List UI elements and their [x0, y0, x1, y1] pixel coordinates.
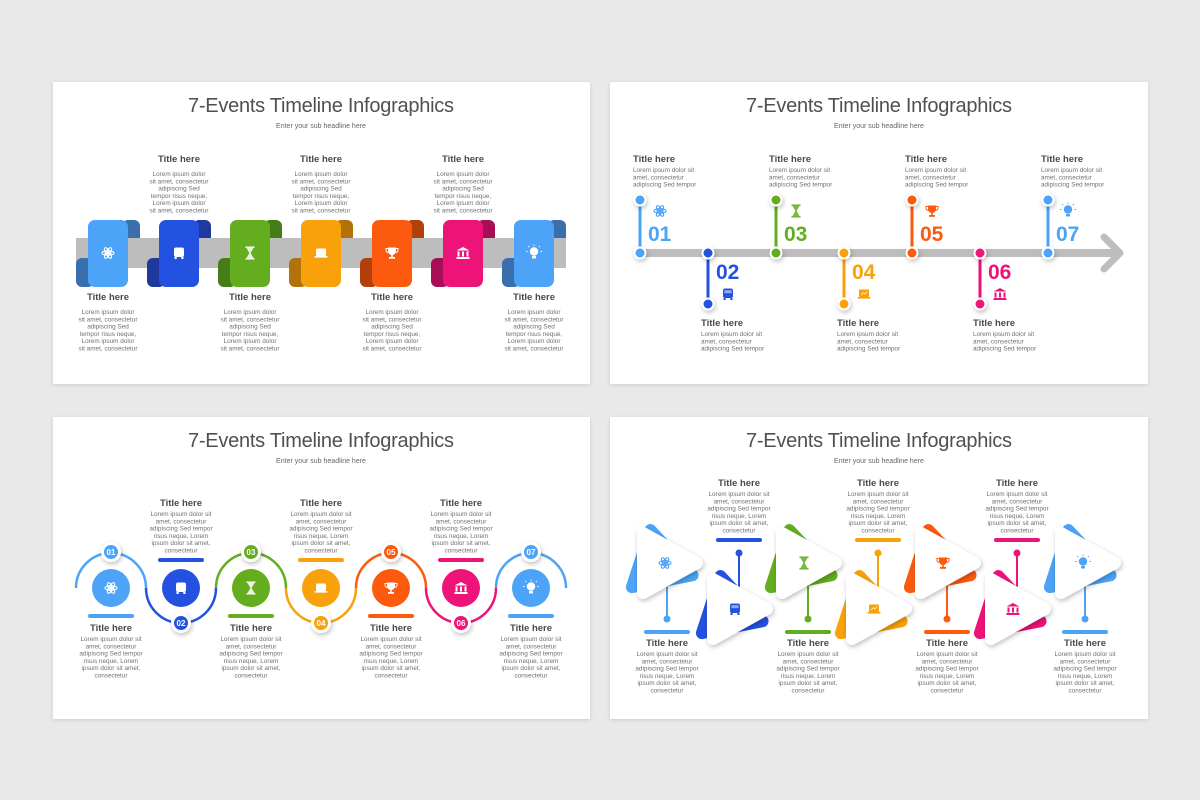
text blocks: adipiscing Sed — [513, 324, 555, 331]
number badges: 01 — [107, 548, 116, 557]
subtitle: Enter your sub headline here — [276, 123, 366, 130]
text blocks: Title here — [300, 498, 342, 509]
text blocks: Lorem ipsum dolor sit — [80, 636, 142, 643]
text blocks: Lorem ipsum dolor — [295, 171, 348, 178]
text blocks: adipiscing Sed — [229, 324, 271, 331]
stems and nodes — [634, 194, 1054, 310]
numbers and icons: 04 — [852, 261, 876, 284]
text blocks — [635, 478, 1117, 694]
text blocks: adipiscing Sed tempor — [499, 651, 563, 658]
text blocks: risus neque, Lorem — [364, 658, 418, 665]
text blocks: amet, consectetur — [633, 174, 685, 181]
text blocks: adipiscing Sed — [158, 186, 200, 193]
text blocks: risus neque, Lorem — [224, 658, 278, 665]
text blocks: Title here — [701, 318, 743, 329]
text blocks: sit amet, consectetur — [150, 178, 209, 185]
text blocks: Title here — [370, 623, 412, 634]
arrow — [640, 237, 1120, 269]
text blocks: consectetur — [650, 688, 684, 694]
text blocks: amet, consectetur — [922, 658, 973, 665]
text blocks: Title here — [633, 154, 675, 165]
subtitle: Enter your sub headline here — [834, 123, 924, 130]
stems, dots and bars — [644, 538, 1108, 634]
text blocks: adipiscing Sed tempor — [769, 182, 833, 189]
text blocks: ipsum dolor sit amet, — [362, 665, 421, 672]
text blocks: sit amet, consectetur — [434, 208, 493, 214]
text blocks: sit amet, consectetur — [79, 316, 138, 323]
text blocks: tempor risus neque, — [151, 193, 207, 200]
number badges: 04 — [317, 619, 326, 628]
text blocks: Lorem ipsum dolor — [153, 171, 206, 178]
text blocks: Title here — [87, 292, 129, 303]
text blocks: Lorem ipsum dolor sit — [708, 491, 770, 498]
text blocks: risus neque, Lorem — [504, 658, 558, 665]
text blocks: Lorem ipsum dolor sit — [701, 331, 762, 338]
text blocks: ipsum dolor sit amet, — [292, 540, 351, 547]
text blocks: ipsum dolor sit amet, — [82, 665, 141, 672]
text blocks: ipsum dolor sit amet, — [710, 520, 769, 527]
text blocks: risus neque, Lorem — [84, 658, 138, 665]
text blocks: Lorem ipsum dolor — [224, 309, 277, 316]
text blocks: risus neque, Lorem — [294, 533, 348, 540]
text blocks: tempor risus neque, — [364, 331, 420, 338]
text blocks: Title here — [837, 318, 879, 329]
text blocks: tempor risus neque, — [80, 331, 136, 338]
text blocks: Title here — [371, 292, 413, 303]
cards — [88, 220, 554, 287]
text blocks: sit amet, consectetur — [292, 208, 351, 214]
text blocks: adipiscing Sed tempor — [79, 651, 143, 658]
text blocks: adipiscing Sed tempor — [985, 506, 1049, 513]
text blocks: amet, consectetur — [1041, 174, 1093, 181]
text blocks: Lorem ipsum dolor sit — [973, 331, 1034, 338]
text blocks: adipiscing Sed tempor — [915, 666, 979, 673]
text blocks: adipiscing Sed tempor — [776, 666, 840, 673]
text blocks: adipiscing Sed tempor — [149, 526, 213, 533]
text blocks: sit amet, consectetur — [363, 346, 422, 352]
text blocks: Lorem ipsum dolor — [153, 200, 206, 207]
text blocks: ipsum dolor sit amet, — [918, 680, 977, 687]
text blocks: adipiscing Sed tempor — [1053, 666, 1117, 673]
number badges: 02 — [177, 619, 186, 628]
numbers and icons: 01 — [648, 223, 672, 246]
text blocks: amet, consectetur — [853, 498, 904, 505]
panel: triangle timeline — [610, 417, 1148, 719]
number badges: 06 — [457, 619, 466, 628]
text blocks: amet, consectetur — [769, 174, 821, 181]
text blocks: consectetur — [164, 548, 198, 554]
numbers and icons: 06 — [988, 261, 1011, 284]
text blocks: amet, consectetur — [436, 518, 487, 525]
text blocks: consectetur — [94, 672, 128, 680]
text blocks — [79, 498, 563, 680]
text blocks: risus neque, Lorem — [712, 513, 766, 520]
text blocks: Lorem ipsum dolor — [437, 171, 490, 178]
text blocks: sit amet, consectetur — [221, 316, 280, 323]
text blocks: Title here — [440, 498, 482, 509]
text blocks: Title here — [513, 292, 555, 303]
title: 7-Events Timeline Infographics — [746, 95, 1012, 117]
text blocks: amet, consectetur — [296, 518, 347, 525]
text blocks: tempor risus neque, — [435, 193, 491, 200]
text blocks: risus neque, Lorem — [640, 673, 694, 680]
text blocks: adipiscing Sed — [371, 324, 413, 331]
numbers and icons — [648, 202, 1079, 300]
text blocks: Title here — [857, 478, 899, 489]
text blocks: adipiscing Sed tempor — [1041, 182, 1105, 189]
text blocks: adipiscing Sed — [300, 186, 342, 193]
text blocks: ipsum dolor sit amet, — [502, 665, 561, 672]
text blocks: sit amet, consectetur — [292, 178, 351, 185]
text blocks: ipsum dolor sit amet, — [988, 520, 1047, 527]
text blocks: Lorem ipsum dolor sit — [1041, 167, 1102, 174]
text blocks: Lorem ipsum dolor — [508, 309, 561, 316]
number badges: 03 — [247, 548, 256, 557]
text blocks: Lorem ipsum dolor — [82, 338, 135, 345]
text blocks: amet, consectetur — [366, 643, 417, 650]
number badges: 05 — [387, 548, 396, 557]
text blocks: amet, consectetur — [973, 338, 1025, 345]
text blocks: Title here — [1064, 638, 1106, 649]
text blocks: Title here — [442, 154, 484, 165]
text blocks: Lorem ipsum dolor sit — [500, 636, 562, 643]
text blocks: amet, consectetur — [156, 518, 207, 525]
text blocks: Lorem ipsum dolor — [224, 338, 277, 345]
text blocks: adipiscing Sed tempor — [219, 651, 283, 658]
text blocks: consectetur — [722, 528, 756, 534]
text blocks: tempor risus neque, — [506, 331, 562, 338]
text blocks: risus neque, Lorem — [851, 513, 905, 520]
text blocks: Title here — [973, 318, 1015, 329]
text blocks — [633, 154, 1105, 353]
text blocks: sit amet, consectetur — [505, 316, 564, 323]
text blocks: adipiscing Sed tempor — [429, 526, 493, 533]
text blocks: adipiscing Sed — [87, 324, 129, 331]
text blocks: Lorem ipsum dolor sit — [290, 511, 352, 518]
text blocks: Title here — [646, 638, 688, 649]
text blocks: consectetur — [1000, 528, 1034, 534]
text blocks: sit amet, consectetur — [505, 346, 564, 352]
text blocks: ipsum dolor sit amet, — [152, 540, 211, 547]
text blocks: consectetur — [861, 528, 895, 534]
text blocks: adipiscing Sed tempor — [635, 666, 699, 673]
text blocks: risus neque, Lorem — [434, 533, 488, 540]
text blocks: adipiscing Sed tempor — [359, 651, 423, 658]
title: 7-Events Timeline Infographics — [188, 95, 454, 117]
title: 7-Events Timeline Infographics — [746, 430, 1012, 452]
text blocks: adipiscing Sed — [442, 186, 484, 193]
text blocks: risus neque, Lorem — [920, 673, 974, 680]
panel: ribbon timeline — [53, 82, 590, 384]
text blocks: Lorem ipsum dolor sit — [1054, 651, 1116, 658]
text blocks: adipiscing Sed tempor — [846, 506, 910, 513]
text blocks: Lorem ipsum dolor — [366, 338, 419, 345]
text blocks: Title here — [300, 154, 342, 165]
text blocks: adipiscing Sed tempor — [837, 346, 901, 353]
panel: wave timeline — [53, 417, 590, 719]
text blocks: consectetur — [930, 688, 964, 694]
text blocks: Title here — [926, 638, 968, 649]
text blocks: Lorem ipsum dolor sit — [986, 491, 1048, 498]
text blocks: Lorem ipsum dolor sit — [837, 331, 898, 338]
text blocks: consectetur — [234, 672, 268, 680]
text blocks: ipsum dolor sit amet, — [638, 680, 697, 687]
text blocks — [79, 154, 564, 352]
text blocks: ipsum dolor sit amet, — [849, 520, 908, 527]
text blocks: Lorem ipsum dolor sit — [905, 167, 966, 174]
text blocks: amet, consectetur — [86, 643, 137, 650]
text blocks: consectetur — [791, 688, 825, 694]
text blocks: Title here — [718, 478, 760, 489]
text blocks: amet, consectetur — [992, 498, 1043, 505]
text blocks: amet, consectetur — [783, 658, 834, 665]
text blocks: sit amet, consectetur — [150, 208, 209, 214]
text blocks: ipsum dolor sit amet, — [1056, 680, 1115, 687]
text blocks: Lorem ipsum dolor sit — [150, 511, 212, 518]
text blocks: Title here — [787, 638, 829, 649]
text blocks: risus neque, Lorem — [154, 533, 208, 540]
numbers and icons: 03 — [784, 223, 807, 246]
text blocks: consectetur — [374, 672, 408, 680]
text blocks: tempor risus neque, — [293, 193, 349, 200]
text blocks: Lorem ipsum dolor — [437, 200, 490, 207]
numbers and icons: 05 — [920, 223, 944, 246]
text blocks: consectetur — [1068, 688, 1102, 694]
text blocks: Lorem ipsum dolor sit — [777, 651, 839, 658]
text blocks: Lorem ipsum dolor sit — [847, 491, 909, 498]
text blocks: Lorem ipsum dolor sit — [430, 511, 492, 518]
text blocks: risus neque, Lorem — [1058, 673, 1112, 680]
panel: arrow timeline — [610, 82, 1148, 384]
text blocks: Lorem ipsum dolor sit — [916, 651, 978, 658]
text blocks: Lorem ipsum dolor sit — [220, 636, 282, 643]
text blocks: ipsum dolor sit amet, — [432, 540, 491, 547]
number badges: 07 — [527, 548, 536, 557]
text blocks: sit amet, consectetur — [221, 346, 280, 352]
text blocks: adipiscing Sed tempor — [633, 182, 697, 189]
text blocks: Lorem ipsum dolor — [82, 309, 135, 316]
text blocks: Title here — [158, 154, 200, 165]
text blocks: Title here — [996, 478, 1038, 489]
text blocks: amet, consectetur — [226, 643, 277, 650]
text blocks: adipiscing Sed tempor — [289, 526, 353, 533]
text blocks: amet, consectetur — [701, 338, 753, 345]
text blocks: Lorem ipsum dolor — [366, 309, 419, 316]
text blocks: Lorem ipsum dolor — [295, 200, 348, 207]
ribbon band — [76, 220, 566, 287]
text blocks: sit amet, consectetur — [434, 178, 493, 185]
text blocks: sit amet, consectetur — [363, 316, 422, 323]
text blocks: Title here — [160, 498, 202, 509]
numbers and icons: 02 — [716, 261, 739, 284]
text blocks: Lorem ipsum dolor sit — [360, 636, 422, 643]
text blocks: Title here — [229, 292, 271, 303]
text blocks: sit amet, consectetur — [79, 346, 138, 352]
text blocks: adipiscing Sed tempor — [973, 346, 1037, 353]
text blocks: adipiscing Sed tempor — [707, 506, 771, 513]
text blocks: Title here — [510, 623, 552, 634]
text blocks: Title here — [905, 154, 947, 165]
text blocks: tempor risus neque, — [222, 331, 278, 338]
text blocks: Lorem ipsum dolor sit — [633, 167, 694, 174]
text blocks: risus neque, Lorem — [781, 673, 835, 680]
text blocks: consectetur — [444, 548, 478, 554]
triangles — [632, 530, 1120, 650]
subtitle: Enter your sub headline here — [276, 458, 366, 465]
text blocks: Lorem ipsum dolor — [508, 338, 561, 345]
text blocks: amet, consectetur — [506, 643, 557, 650]
text blocks: Lorem ipsum dolor sit — [636, 651, 698, 658]
text blocks: ipsum dolor sit amet, — [222, 665, 281, 672]
subtitle: Enter your sub headline here — [834, 458, 924, 465]
text blocks: risus neque, Lorem — [990, 513, 1044, 520]
text blocks: amet, consectetur — [837, 338, 889, 345]
text blocks: Title here — [90, 623, 132, 634]
text blocks: amet, consectetur — [905, 174, 957, 181]
wave — [76, 553, 566, 623]
text blocks: ipsum dolor sit amet, — [779, 680, 838, 687]
text blocks: amet, consectetur — [1060, 658, 1111, 665]
text blocks: consectetur — [304, 548, 338, 554]
text blocks: adipiscing Sed tempor — [701, 346, 765, 353]
text blocks: amet, consectetur — [714, 498, 765, 505]
text blocks: consectetur — [514, 672, 548, 680]
text blocks: adipiscing Sed tempor — [905, 182, 969, 189]
text blocks: Title here — [1041, 154, 1083, 165]
text blocks: Lorem ipsum dolor sit — [769, 167, 830, 174]
title: 7-Events Timeline Infographics — [188, 430, 454, 452]
text blocks: Title here — [230, 623, 272, 634]
text blocks: amet, consectetur — [642, 658, 693, 665]
numbers and icons: 07 — [1056, 223, 1079, 246]
circles with icons — [92, 569, 550, 607]
color bars — [88, 558, 554, 618]
text blocks: Title here — [769, 154, 811, 165]
number badges — [101, 542, 541, 633]
